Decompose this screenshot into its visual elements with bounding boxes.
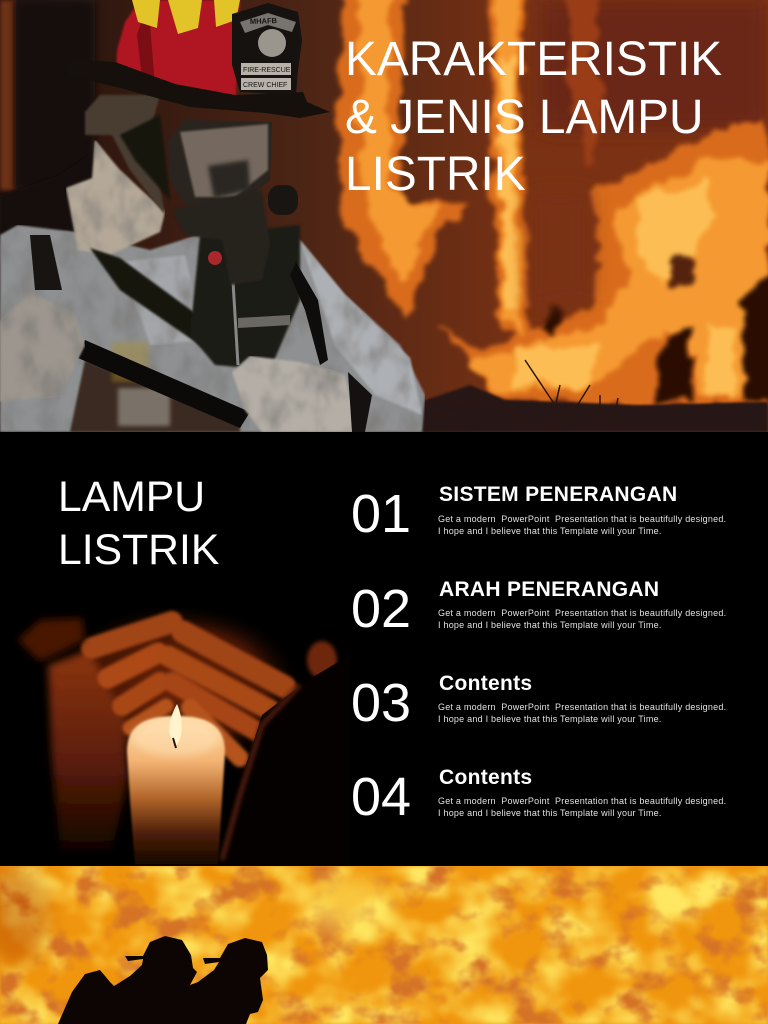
list item 01 (351, 483, 726, 544)
list item 01: SISTEM PENERANGAN (439, 483, 677, 506)
mask and visor (168, 120, 272, 205)
title (345, 33, 722, 201)
list item 03 (351, 672, 726, 733)
list item 02: ARAH PENERANGAN (439, 578, 659, 601)
list item 03: Contents (439, 672, 532, 695)
lower body dark (70, 360, 240, 432)
title: & JENIS LAMPU (345, 91, 704, 144)
ground (420, 385, 768, 432)
list item 03: 03 (351, 673, 411, 733)
suit (0, 225, 425, 432)
charred trunks (540, 255, 768, 402)
palm glow (92, 612, 288, 744)
right hand back (246, 662, 340, 767)
list item 03: Get a modern PowerPoint Presentation that is beautifully designed. (438, 702, 726, 712)
fire flames (337, 0, 768, 405)
straps (89, 247, 200, 346)
list item 02: Get a modern PowerPoint Presentation that is beautifully designed. (438, 608, 726, 618)
list item 02: I hope and I believe that this Template will your Time. (438, 620, 662, 630)
list item 01: Get a modern PowerPoint Presentation that is beautifully designed. (438, 514, 726, 524)
list item 04: 04 (351, 767, 411, 827)
icon: candle between hands (18, 603, 350, 866)
heading: lampu listrik (58, 473, 219, 574)
hose (78, 340, 250, 428)
left palm (48, 650, 128, 850)
badge: MHAFB (250, 16, 278, 26)
fingers (92, 622, 285, 758)
flame (169, 704, 182, 746)
list item 04 (351, 766, 726, 827)
helmet (116, 0, 240, 96)
candle body (127, 716, 225, 866)
icon: firefighter silhouettes (58, 936, 268, 1024)
badge (232, 3, 302, 95)
panel: fire photo footer with firefighter silhouettes (0, 865, 768, 1024)
list item 01: I hope and I believe that this Template will your Time. (438, 526, 662, 536)
list item 02 (351, 578, 726, 639)
thumbs (18, 618, 85, 660)
list item 02: 02 (351, 579, 411, 639)
list item 04: Contents (439, 766, 532, 789)
badge: CREW CHIEF (243, 82, 287, 89)
hood (85, 95, 165, 215)
collar (66, 140, 165, 255)
badge: FIRE-RESCUE (243, 67, 291, 74)
heading: lampu listrik: LISTRIK (58, 526, 219, 574)
list item 04: Get a modern PowerPoint Presentation that is beautifully designed. (438, 796, 726, 806)
list item 01: 01 (351, 484, 411, 544)
gloves (0, 292, 85, 402)
panel: black contents section (0, 432, 768, 866)
panel: firefighter photo header (0, 0, 768, 432)
title: KARAKTERISTIK (345, 33, 722, 86)
backpack strap and shoulder shadow (0, 154, 92, 234)
list item 03: I hope and I believe that this Template will your Time. (438, 714, 662, 724)
list item 04: I hope and I believe that this Template will your Time. (438, 808, 662, 818)
firefighter (0, 0, 425, 432)
left wall stripe (0, 0, 15, 190)
heading: lampu listrik: LAMPU (58, 473, 205, 521)
title: LISTRIK (345, 148, 526, 201)
